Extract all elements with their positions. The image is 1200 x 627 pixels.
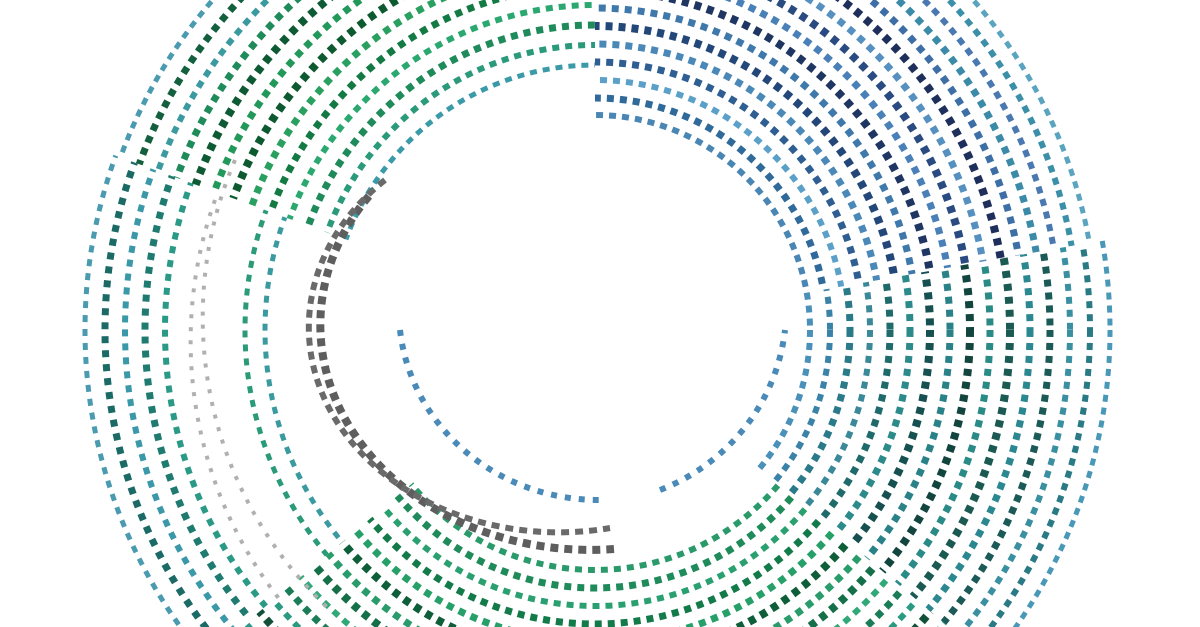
ring sector: left teal xyxy=(82,154,340,627)
ring sector: top-right blue xyxy=(595,0,1092,294)
ring sector: top-left green xyxy=(120,0,595,240)
ring sector: right dark teal xyxy=(758,240,1112,627)
light gray dotted arc xyxy=(191,160,330,610)
gray inner arc xyxy=(309,180,614,550)
ring sector: bottom green xyxy=(244,482,946,627)
inner blue arc xyxy=(400,330,785,500)
